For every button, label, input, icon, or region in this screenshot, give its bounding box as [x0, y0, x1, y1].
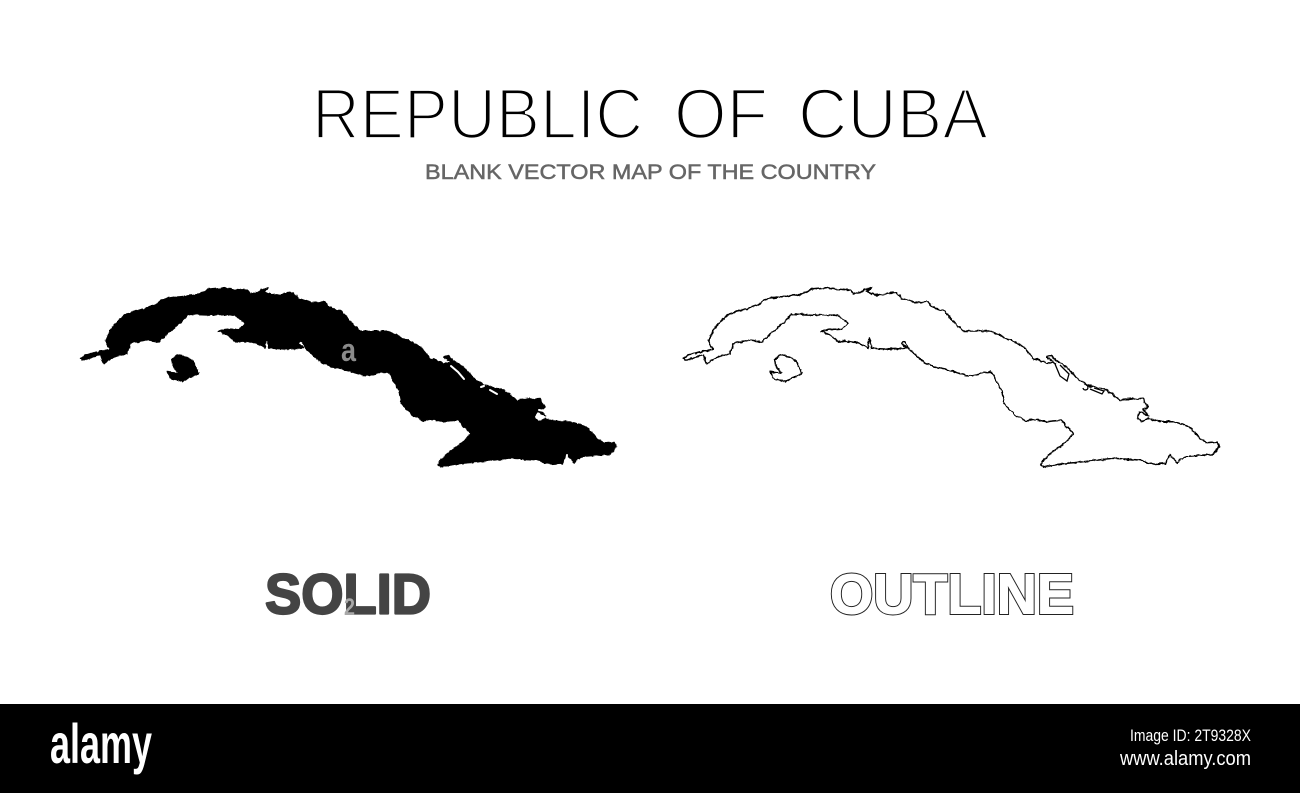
title: CUBA	[798, 76, 989, 154]
watermark letter on SOLID label: 2	[344, 594, 355, 621]
solid map: Isla de la Juventud	[167, 355, 199, 382]
subtitle: BLANK VECTOR MAP OF THE COUNTRY	[425, 160, 876, 184]
label: OUTLINE: OUTLINE	[830, 562, 1074, 626]
outline map: main island	[683, 287, 1219, 467]
title: OF	[674, 76, 768, 154]
solid map of Cuba	[80, 287, 616, 467]
image id: Image ID: 2T9328X	[1130, 726, 1251, 745]
alamy footer bar	[0, 704, 1300, 793]
solid map: coastal gaps	[451, 366, 567, 461]
title	[312, 76, 989, 154]
label: OUTLINE: OUTLINE	[830, 562, 1074, 626]
website: www.alamy.com	[1119, 748, 1251, 770]
outline map: offshore cays	[1055, 364, 1104, 394]
title: REPUBLIC	[312, 76, 643, 154]
outline map of Cuba	[683, 287, 1219, 467]
solid map: main island	[80, 287, 616, 467]
watermark letter on map: a	[341, 332, 356, 368]
outline map: Isla de la Juventud	[770, 355, 802, 382]
alamy logo: alamy	[50, 712, 152, 775]
label: SOLID: SOLID	[265, 562, 431, 626]
